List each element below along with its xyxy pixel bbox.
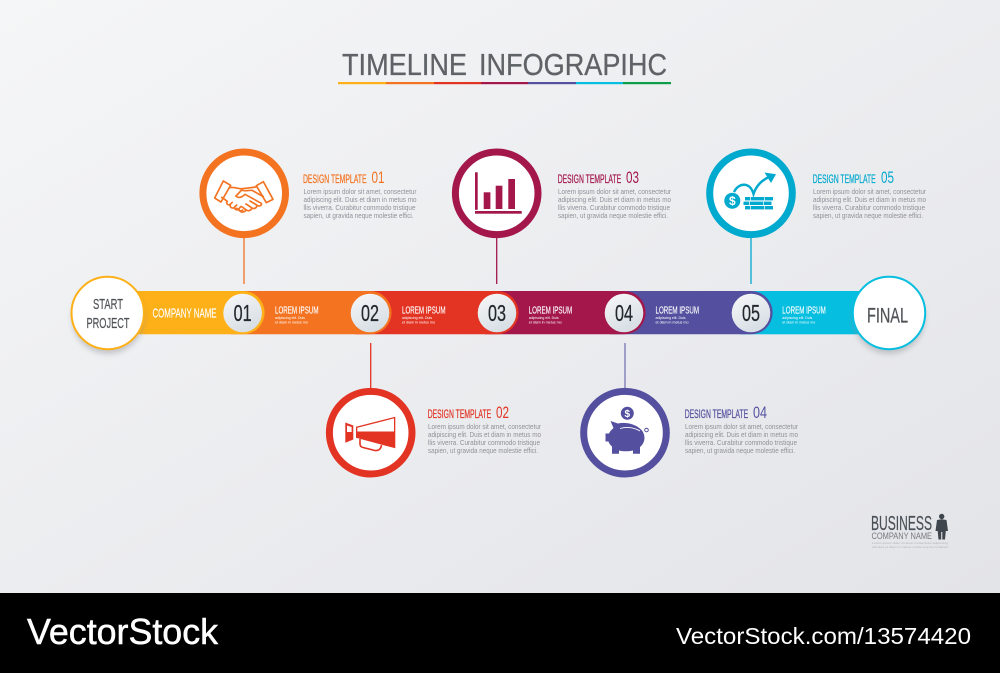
step 01: 01 xyxy=(234,300,252,326)
step 05 xyxy=(732,294,770,332)
heading xyxy=(303,168,384,187)
timeline bar xyxy=(125,291,875,334)
bar label 1: et diam in metus mo xyxy=(275,319,309,324)
body text: llis viverra. Curabitur commodo tristique xyxy=(685,438,797,447)
business logo: Lorem ipsum dolor sit amet consectetur adipiscing xyxy=(872,541,948,545)
business logo xyxy=(871,513,948,549)
heading xyxy=(813,168,894,187)
heading xyxy=(558,168,639,187)
heading: DESIGN TEMPLATE xyxy=(303,174,367,186)
icon: bar chart xyxy=(475,172,522,214)
business logo: BUSINESS xyxy=(871,513,932,535)
final badge: FINAL xyxy=(867,304,908,328)
bar label 1: LOREM IPSUM xyxy=(275,304,318,316)
heading: 04 xyxy=(753,403,767,422)
bar label 5: LOREM IPSUM xyxy=(782,304,826,316)
bar label 2 xyxy=(402,304,446,324)
bar label 1: adipiscing elit. Duis xyxy=(275,315,305,320)
heading: 03 xyxy=(626,168,639,187)
footer url: VectorStock.com/13574420 xyxy=(676,623,971,649)
title: TIMELINE xyxy=(342,47,467,82)
icon: piggy bank xyxy=(606,407,648,454)
body text: adipiscing elit. Duis et diam in metus mo xyxy=(813,195,926,204)
icon: coin and rising arrow xyxy=(724,172,776,209)
body text: adipiscing elit. Duis et diam in metus mo xyxy=(428,430,541,439)
title: INFOGRAPIHC xyxy=(479,47,667,82)
panel: template 03 xyxy=(455,152,672,284)
step 04 xyxy=(605,294,643,332)
title xyxy=(338,47,671,84)
body text: sapien, ut gravida neque molestie effici. xyxy=(304,211,414,220)
body text: Lorem ipsum dolor sit amet, consectetur xyxy=(428,422,542,431)
body text: sapien, ut gravida neque molestie effici. xyxy=(428,446,538,455)
heading xyxy=(428,403,509,422)
panel: template 01 xyxy=(203,152,417,284)
heading: DESIGN TEMPLATE xyxy=(813,174,876,186)
body text: llis viverra. Curabitur commodo tristique xyxy=(813,203,925,212)
bar label: company name: COMPANY NAME xyxy=(152,306,217,320)
body text: adipiscing elit. Duis et diam in metus mo xyxy=(304,195,416,204)
panel: template 05 xyxy=(710,152,927,284)
bar label 1 xyxy=(275,304,318,324)
body text: Lorem ipsum dolor sit amet, consectetur xyxy=(813,187,927,196)
step 05: 05 xyxy=(742,300,760,326)
body text: sapien, ut gravida neque molestie effici. xyxy=(558,211,668,220)
heading: 02 xyxy=(496,403,509,422)
bar label 2: LOREM IPSUM xyxy=(402,304,446,316)
body text xyxy=(685,422,799,455)
step 04: 04 xyxy=(615,300,633,326)
bar label 4: adipiscing elit. Duis xyxy=(656,315,686,320)
bar label 2: adipiscing elit. Duis xyxy=(402,315,432,320)
start badge: START xyxy=(93,296,123,313)
step 02 xyxy=(351,294,389,332)
start badge: PROJECT xyxy=(86,315,130,332)
icon: piggy bank: $ xyxy=(625,409,631,420)
heading: DESIGN TEMPLATE xyxy=(428,409,491,421)
icon: coin and rising arrow: $ xyxy=(729,194,736,208)
body text: llis viverra. Curabitur commodo tristique xyxy=(558,203,670,212)
step 03: 03 xyxy=(488,300,506,326)
bar label 3 xyxy=(529,304,572,324)
step 01 xyxy=(223,294,262,332)
footer band xyxy=(0,593,1000,673)
bar label 3: et diam in metus mo xyxy=(529,319,562,324)
body text: llis viverra. Curabitur commodo tristique xyxy=(304,203,416,212)
body text xyxy=(558,187,672,220)
start badge xyxy=(72,277,144,354)
footer wordmark: VectorStock xyxy=(27,611,219,652)
heading xyxy=(685,403,767,422)
business logo: elit duis et diam in metus mollis viverra curabitur xyxy=(872,545,948,549)
body text: adipiscing elit. Duis et diam in metus mo xyxy=(558,195,671,204)
bar label 2: et diam in metus mo xyxy=(402,319,436,324)
body text xyxy=(304,187,417,220)
body text: adipiscing elit. Duis et diam in metus mo xyxy=(685,430,798,439)
panel: template 04 xyxy=(584,343,799,474)
heading: DESIGN TEMPLATE xyxy=(558,174,621,186)
bar label 4 xyxy=(656,304,699,324)
bar label 3: adipiscing elit. Duis xyxy=(529,315,559,320)
heading: 05 xyxy=(881,168,894,187)
body text xyxy=(428,422,542,455)
heading: DESIGN TEMPLATE xyxy=(685,409,748,421)
icon: megaphone xyxy=(345,417,395,451)
bar label 5: adipiscing elit. Duis xyxy=(782,315,812,320)
body text: Lorem ipsum dolor sit amet, consectetur xyxy=(304,187,417,196)
bar label 4: LOREM IPSUM xyxy=(656,304,699,316)
step 03 xyxy=(478,294,516,332)
body text: llis viverra. Curabitur commodo tristique xyxy=(428,438,540,447)
body text: Lorem ipsum dolor sit amet, consectetur xyxy=(685,422,799,431)
step 02: 02 xyxy=(361,300,379,326)
icon: handshake xyxy=(215,181,273,212)
heading: 01 xyxy=(372,168,384,187)
panel: template 02 xyxy=(329,343,542,474)
body text: sapien, ut gravida neque molestie effici. xyxy=(813,211,923,220)
final badge xyxy=(853,277,925,354)
business logo: COMPANY NAME xyxy=(872,531,932,542)
bar label 5: et diam in metus mo xyxy=(782,319,816,324)
bar label 4: et diam in metus mo xyxy=(656,319,689,324)
body text: sapien, ut gravida neque molestie effici. xyxy=(685,446,795,455)
bar label 3: LOREM IPSUM xyxy=(529,304,572,316)
bar label 5 xyxy=(782,304,826,324)
body text xyxy=(813,187,927,220)
body text: Lorem ipsum dolor sit amet, consectetur xyxy=(558,187,672,196)
icon: businessman xyxy=(936,514,948,540)
